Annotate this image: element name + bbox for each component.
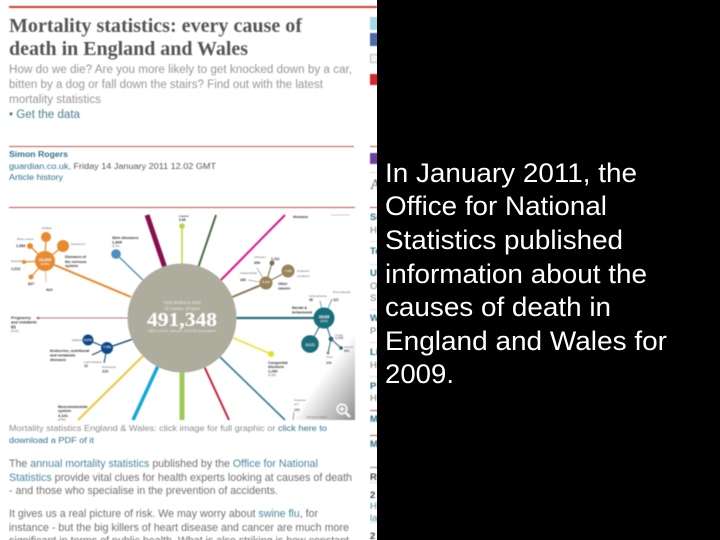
- cluster: diseases of the nervous system: the nervous: [65, 260, 87, 264]
- node: lasers: 0.65: [179, 218, 186, 222]
- node: congenital diseases: 1,250: [268, 370, 278, 374]
- text: narrative about the ONS statistics: England and Wales for: [385, 326, 667, 356]
- cluster: diseases of the nervous system: Multiple: [42, 226, 52, 230]
- standfirst: [9, 64, 352, 121]
- cluster: endocrine diseases: 210: [102, 370, 108, 374]
- sidebar links: UK: [370, 268, 384, 279]
- label: diseases: [293, 215, 350, 219]
- cluster: other causes: conditions: [297, 274, 310, 278]
- node: congenital diseases: diseases: [268, 365, 284, 369]
- cluster: other causes: Unknown: [254, 255, 266, 259]
- cluster: endocrine diseases: [50, 334, 116, 374]
- cluster: endocrine diseases: 7,789: [103, 345, 111, 349]
- cluster: other causes: Other: [278, 282, 288, 286]
- paragraph 2: [9, 508, 349, 540]
- label: pregnancy and childbirth: Pregnancy: [11, 315, 32, 320]
- top red rule: [9, 6, 377, 8]
- text: narrative about the ONS statistics: In January 2011, the: [385, 158, 637, 188]
- node: lasers: [179, 214, 189, 229]
- text: narrative about the ONS statistics: [385, 158, 667, 389]
- headline: death in England and Wales: [9, 38, 248, 60]
- central circle: total deaths: 486.4 crude rate per 100,000 population: [148, 329, 216, 333]
- cluster: mental and behavioural: 121: [333, 298, 339, 302]
- icons: share buttons: [370, 17, 378, 85]
- cluster: diseases of the nervous system: [11, 226, 87, 292]
- cluster: endocrine diseases: 11: [84, 364, 88, 368]
- paragraph 1: The annual mortality statistics published by the Office for National: [9, 458, 318, 470]
- label: pregnancy and childbirth: 63: [11, 324, 16, 330]
- text: narrative about the ONS statistics: Statistics published: [385, 225, 623, 255]
- cluster: endocrine diseases: Lipid disease: [84, 360, 102, 364]
- sidebar links: W: [370, 313, 379, 324]
- cluster: diseases of the nervous system: Muscular: [11, 259, 22, 263]
- panel: black text panel: [377, 0, 720, 540]
- label: musculoskeletal system: Musculoskeletal: [58, 405, 87, 409]
- sidebar links: [370, 212, 384, 540]
- cluster: diseases of the nervous system: system: [65, 264, 79, 268]
- text: narrative about the ONS statistics: 2009.: [385, 359, 454, 389]
- cluster: mental and behavioural: behavioural: [292, 310, 312, 314]
- sidebar links: Re: [370, 472, 382, 483]
- sidebar links: Li: [370, 347, 378, 358]
- cluster: other causes: causes: [278, 286, 290, 290]
- text: narrative about the ONS statistics: Office for National: [385, 191, 607, 221]
- standfirst: bitten by a dog or fall down the stairs? Find out with the latest: [9, 79, 324, 91]
- cluster: diseases of the nervous system: 1,012: [11, 267, 21, 271]
- sidebar links: M: [370, 439, 378, 450]
- standfirst: How do we die? Are you more likely to get knocked down by a car,: [9, 64, 352, 76]
- cluster: diseases of the nervous system: 1,983: [16, 244, 26, 248]
- cluster: diseases of the nervous system: (4.5%): [41, 262, 49, 266]
- cluster: endocrine diseases: Endocrine, nutritional: [50, 349, 89, 353]
- cluster: mental and behavioural: Schizophrenia: [309, 294, 327, 298]
- byline: Simon Rogers: [9, 149, 68, 159]
- label: musculoskeletal system: [58, 405, 87, 422]
- central circle: total deaths: All causes: all ages: [164, 306, 200, 311]
- cluster: endocrine diseases: 5,979: [84, 338, 92, 342]
- cluster: mental and behavioural: 45: [309, 298, 313, 302]
- node: lasers: Lasers: [179, 214, 189, 218]
- label: sequelae: Transport related: [306, 415, 328, 419]
- paragraph 2: instance - but the big killers of heart disease and cancer are much more: [9, 522, 349, 534]
- corner shading: [290, 330, 355, 420]
- cluster: mental and behavioural: (3.67): [320, 319, 328, 323]
- node: skin diseases: 1,849: [112, 240, 123, 244]
- cluster: mental and behavioural: 208: [326, 361, 332, 365]
- panel: article page: [9, 6, 377, 208]
- cluster: mental and behavioural: Mood disorder: [333, 290, 351, 294]
- cluster: endocrine diseases: Nutritional: [102, 365, 116, 369]
- sidebar links: H: [370, 393, 377, 404]
- cluster: diseases of the nervous system: Motor neuron: [17, 237, 34, 241]
- cluster: mental and behavioural: [292, 290, 354, 365]
- sidebar links: la: [370, 513, 378, 524]
- cluster: other causes: [240, 255, 310, 290]
- node: skin diseases: [111, 235, 139, 259]
- node: congenital diseases: Congenital: [268, 361, 288, 365]
- sidebar links: P: [370, 381, 377, 392]
- label: pregnancy and childbirth: and childbirth: [11, 320, 37, 324]
- cluster: diseases of the nervous system: 424: [46, 288, 53, 292]
- node: skin diseases: Skin diseases: [112, 235, 139, 240]
- label: diseases: diseases: [293, 215, 308, 219]
- label: pregnancy and childbirth: [11, 315, 39, 333]
- standfirst: • Get the data: [9, 109, 81, 121]
- cluster: mental and behavioural: 541: [344, 349, 350, 353]
- cluster: other causes: 166: [240, 278, 246, 282]
- cluster: other causes: 454: [254, 261, 260, 265]
- cluster: diseases of the nervous system: 21,919: [39, 257, 52, 262]
- paragraph 2: It gives us a real picture of risk. We may worry about swine flu, for: [9, 508, 318, 520]
- byline: [9, 146, 354, 182]
- central circle: total deaths: [128, 264, 236, 372]
- cluster: other causes: 8,193: [262, 280, 270, 284]
- sidebar links: S: [370, 293, 376, 304]
- byline: Article history: [9, 172, 64, 182]
- cluster: other causes: Ill-defined: [297, 269, 310, 273]
- cluster: diseases of the nervous system: Parkinson's: [71, 242, 86, 246]
- node: skin diseases: (0.37): [112, 244, 120, 248]
- cluster: mental and behavioural: 16,021: [305, 343, 315, 347]
- cluster: mental and behavioural: Alcohol: [344, 345, 354, 349]
- sidebar links: Te: [370, 246, 380, 257]
- label: musculoskeletal system: 4,141: [58, 413, 69, 418]
- paragraph 1: Statistics provide vital clues for health experts looking at causes of death: [9, 472, 352, 484]
- cluster: other causes: Indeterminate: [240, 271, 258, 275]
- sidebar links: H: [370, 501, 377, 512]
- sidebar links: H: [370, 360, 377, 371]
- cluster: mental and behavioural: 18,023: [319, 315, 329, 319]
- sidebar links: M: [370, 414, 378, 425]
- cluster: diseases of the nervous system: Diseases of: [65, 255, 87, 259]
- node: congenital diseases: [268, 351, 288, 377]
- central circle: total deaths: 491,348: [147, 309, 217, 331]
- cluster: endocrine diseases: diseases: [50, 358, 66, 362]
- image caption: Mortality statistics England & Wales: click image for full graphic or click here to: [9, 423, 327, 433]
- paragraph 1: - and those who specialise in the prevention of accidents.: [9, 485, 278, 497]
- sidebar links: Se: [370, 212, 382, 223]
- image caption: [9, 423, 327, 445]
- sidebar links: H: [370, 225, 377, 236]
- cluster: endocrine diseases: and metabolic: [50, 354, 76, 358]
- standfirst: mortality statistics: [9, 94, 101, 106]
- chart: causes of death radial graphic: [11, 214, 355, 422]
- text: narrative about the ONS statistics: causes of death in: [385, 292, 611, 322]
- panel: sidebar column (clipped): [370, 17, 384, 540]
- sidebar heading: A: [370, 177, 381, 193]
- label: pregnancy and childbirth: (0.01): [11, 329, 19, 333]
- article body text: [9, 423, 352, 540]
- cluster: other causes: 1,111: [271, 257, 280, 261]
- icon: purple button: [370, 153, 378, 164]
- label: sequelae: and: [294, 402, 299, 406]
- label: musculoskeletal system: system: [58, 409, 72, 413]
- cluster: mental and behavioural: 1,141: [335, 336, 344, 340]
- node: congenital diseases: (0.25): [268, 373, 276, 377]
- label: sequelae: 163: [294, 408, 300, 412]
- cluster: mental and behavioural: Mental &: [292, 306, 307, 310]
- spokes: [37, 215, 320, 420]
- label: sequelae: [293, 398, 328, 420]
- cluster: endocrine diseases: Diabetes: [72, 338, 84, 342]
- image caption: download a PDF of it: [9, 435, 95, 445]
- label: musculoskeletal system: (0.84): [58, 418, 66, 422]
- central circle: total deaths: Total deaths in 2009: [163, 300, 201, 305]
- icon: magnifier: [337, 404, 350, 417]
- label: sequelae: Sequelae: [294, 398, 306, 402]
- cluster: diseases of the nervous system: 827: [28, 282, 34, 286]
- headline: [9, 15, 302, 60]
- sidebar links: P: [370, 326, 376, 337]
- cluster: mental and behavioural: Opiate: [335, 333, 344, 337]
- sidebar links: 2: [370, 490, 375, 501]
- headline: Mortality statistics: every cause of: [9, 15, 302, 37]
- cluster: other causes: 7,008: [284, 269, 292, 273]
- sidebar links: O: [370, 281, 377, 292]
- text: narrative about the ONS statistics: information about the: [385, 259, 647, 289]
- cluster: mental and behavioural: Other: [326, 355, 333, 359]
- byline: guardian.co.uk , Friday 14 January 2011 12.02 GMT: [9, 161, 217, 171]
- paragraph 1: [9, 458, 352, 497]
